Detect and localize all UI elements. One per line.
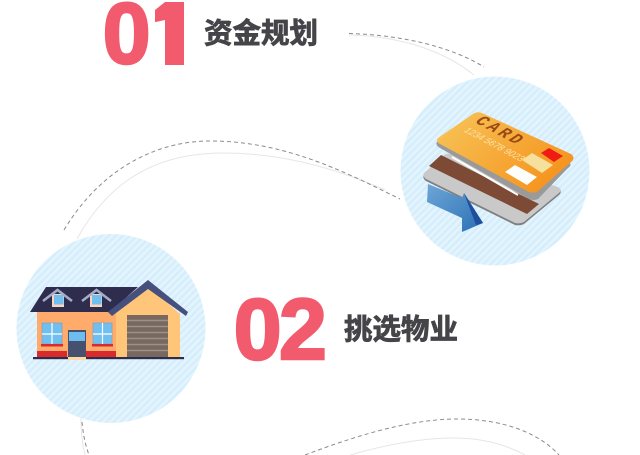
step number 02: 2: [279, 282, 327, 378]
connector curve: bottom arc to next step: [305, 419, 559, 455]
right wall: [116, 286, 180, 357]
panel: house circle: [16, 234, 206, 423]
left wall: [37, 312, 116, 357]
icon: front card: [436, 112, 574, 200]
connector curve: card circle to house circle: [64, 141, 400, 239]
red base: [37, 351, 67, 357]
ground line: [33, 357, 68, 359]
circle background: [400, 76, 590, 266]
icon: house: [30, 280, 188, 360]
gable roof: [108, 280, 188, 316]
windows: [41, 323, 113, 346]
main roof: [30, 287, 138, 312]
card number: 1234 5678 9023: [460, 126, 527, 163]
step number 01: [104, 2, 184, 66]
icon: back card: [423, 154, 561, 225]
icon: blue arrow: [427, 184, 483, 232]
garage door: [127, 315, 168, 357]
card label: CARD: [469, 114, 530, 149]
panel: credit card circle: [400, 76, 590, 266]
connector curve: heading 01 to card circle: [349, 34, 484, 75]
front door: [68, 330, 86, 357]
dormers: [43, 290, 111, 307]
heading: 资金规划: 资金规划: [204, 18, 318, 50]
heading: 挑选物业: 挑选物业: [344, 314, 458, 346]
step number 02: 0: [234, 282, 282, 378]
step number 02: [234, 282, 327, 378]
circle background: [16, 234, 206, 423]
connector curve: house circle downward: [81, 417, 89, 455]
